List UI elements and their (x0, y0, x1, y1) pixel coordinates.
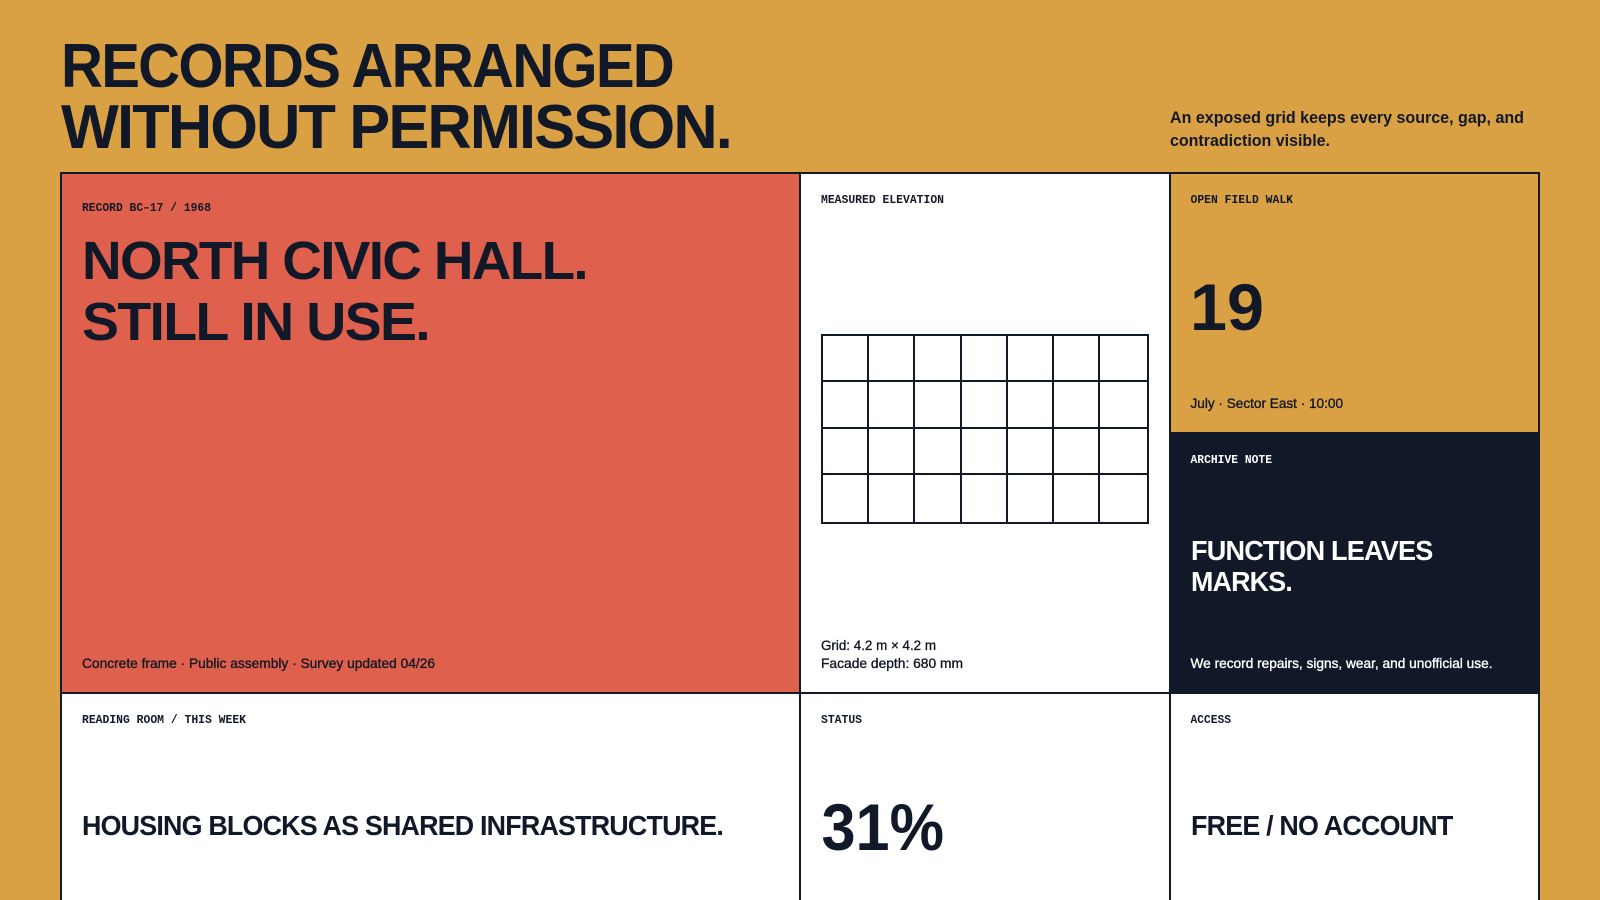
title (61, 32, 731, 162)
elevation measurements: Grid: 4.2 m × 4.2 m (821, 637, 936, 653)
panel: measured elevation (801, 174, 1169, 692)
title: WITHOUT PERMISSION. (61, 93, 731, 162)
archive body text: We record repairs, signs, wear, and unofficial use. (1190, 655, 1492, 671)
archive heading: MARKS. (1191, 566, 1292, 597)
status label: STATUS (821, 714, 862, 727)
archive heading (1191, 535, 1433, 597)
subtitle text block (1170, 108, 1524, 150)
elevation measurements (821, 637, 963, 671)
subtitle text block: contradiction visible. (1170, 131, 1330, 150)
field walk label: OPEN FIELD WALK (1190, 194, 1293, 207)
record label: RECORD BC–17 / 1968 (82, 202, 211, 215)
elevation label: MEASURED ELEVATION (821, 194, 944, 207)
record heading: NORTH CIVIC HALL. (82, 231, 587, 291)
record heading: STILL IN USE. (82, 292, 429, 352)
panel: archive note (1169, 432, 1540, 694)
elevation measurements: Facade depth: 680 mm (821, 655, 963, 671)
title: RECORDS ARRANGED (61, 32, 673, 101)
reading room label: READING ROOM / THIS WEEK (82, 714, 246, 727)
elevation grid diagram (821, 334, 1149, 524)
subtitle text block: An exposed grid keeps every source, gap, and (1170, 108, 1524, 127)
field walk number: 19 (1190, 270, 1264, 344)
panel: north civic hall record (62, 174, 799, 692)
field walk details: July · Sector East · 10:00 (1190, 395, 1343, 411)
record heading (82, 231, 587, 352)
panel: reading room (62, 694, 799, 900)
access heading: FREE / NO ACCOUNT (1191, 810, 1453, 841)
access label: ACCESS (1190, 714, 1231, 727)
status value: 31% (822, 790, 944, 864)
archive heading: FUNCTION LEAVES (1191, 535, 1433, 566)
panel: status (801, 694, 1169, 900)
archive label: ARCHIVE NOTE (1190, 454, 1272, 467)
panel: open field walk (1171, 174, 1538, 432)
reading room heading: HOUSING BLOCKS AS SHARED INFRASTRUCTURE. (82, 810, 723, 841)
record caption: Concrete frame · Public assembly · Survey updated 04/26 (82, 655, 435, 671)
panel: access (1171, 694, 1538, 900)
